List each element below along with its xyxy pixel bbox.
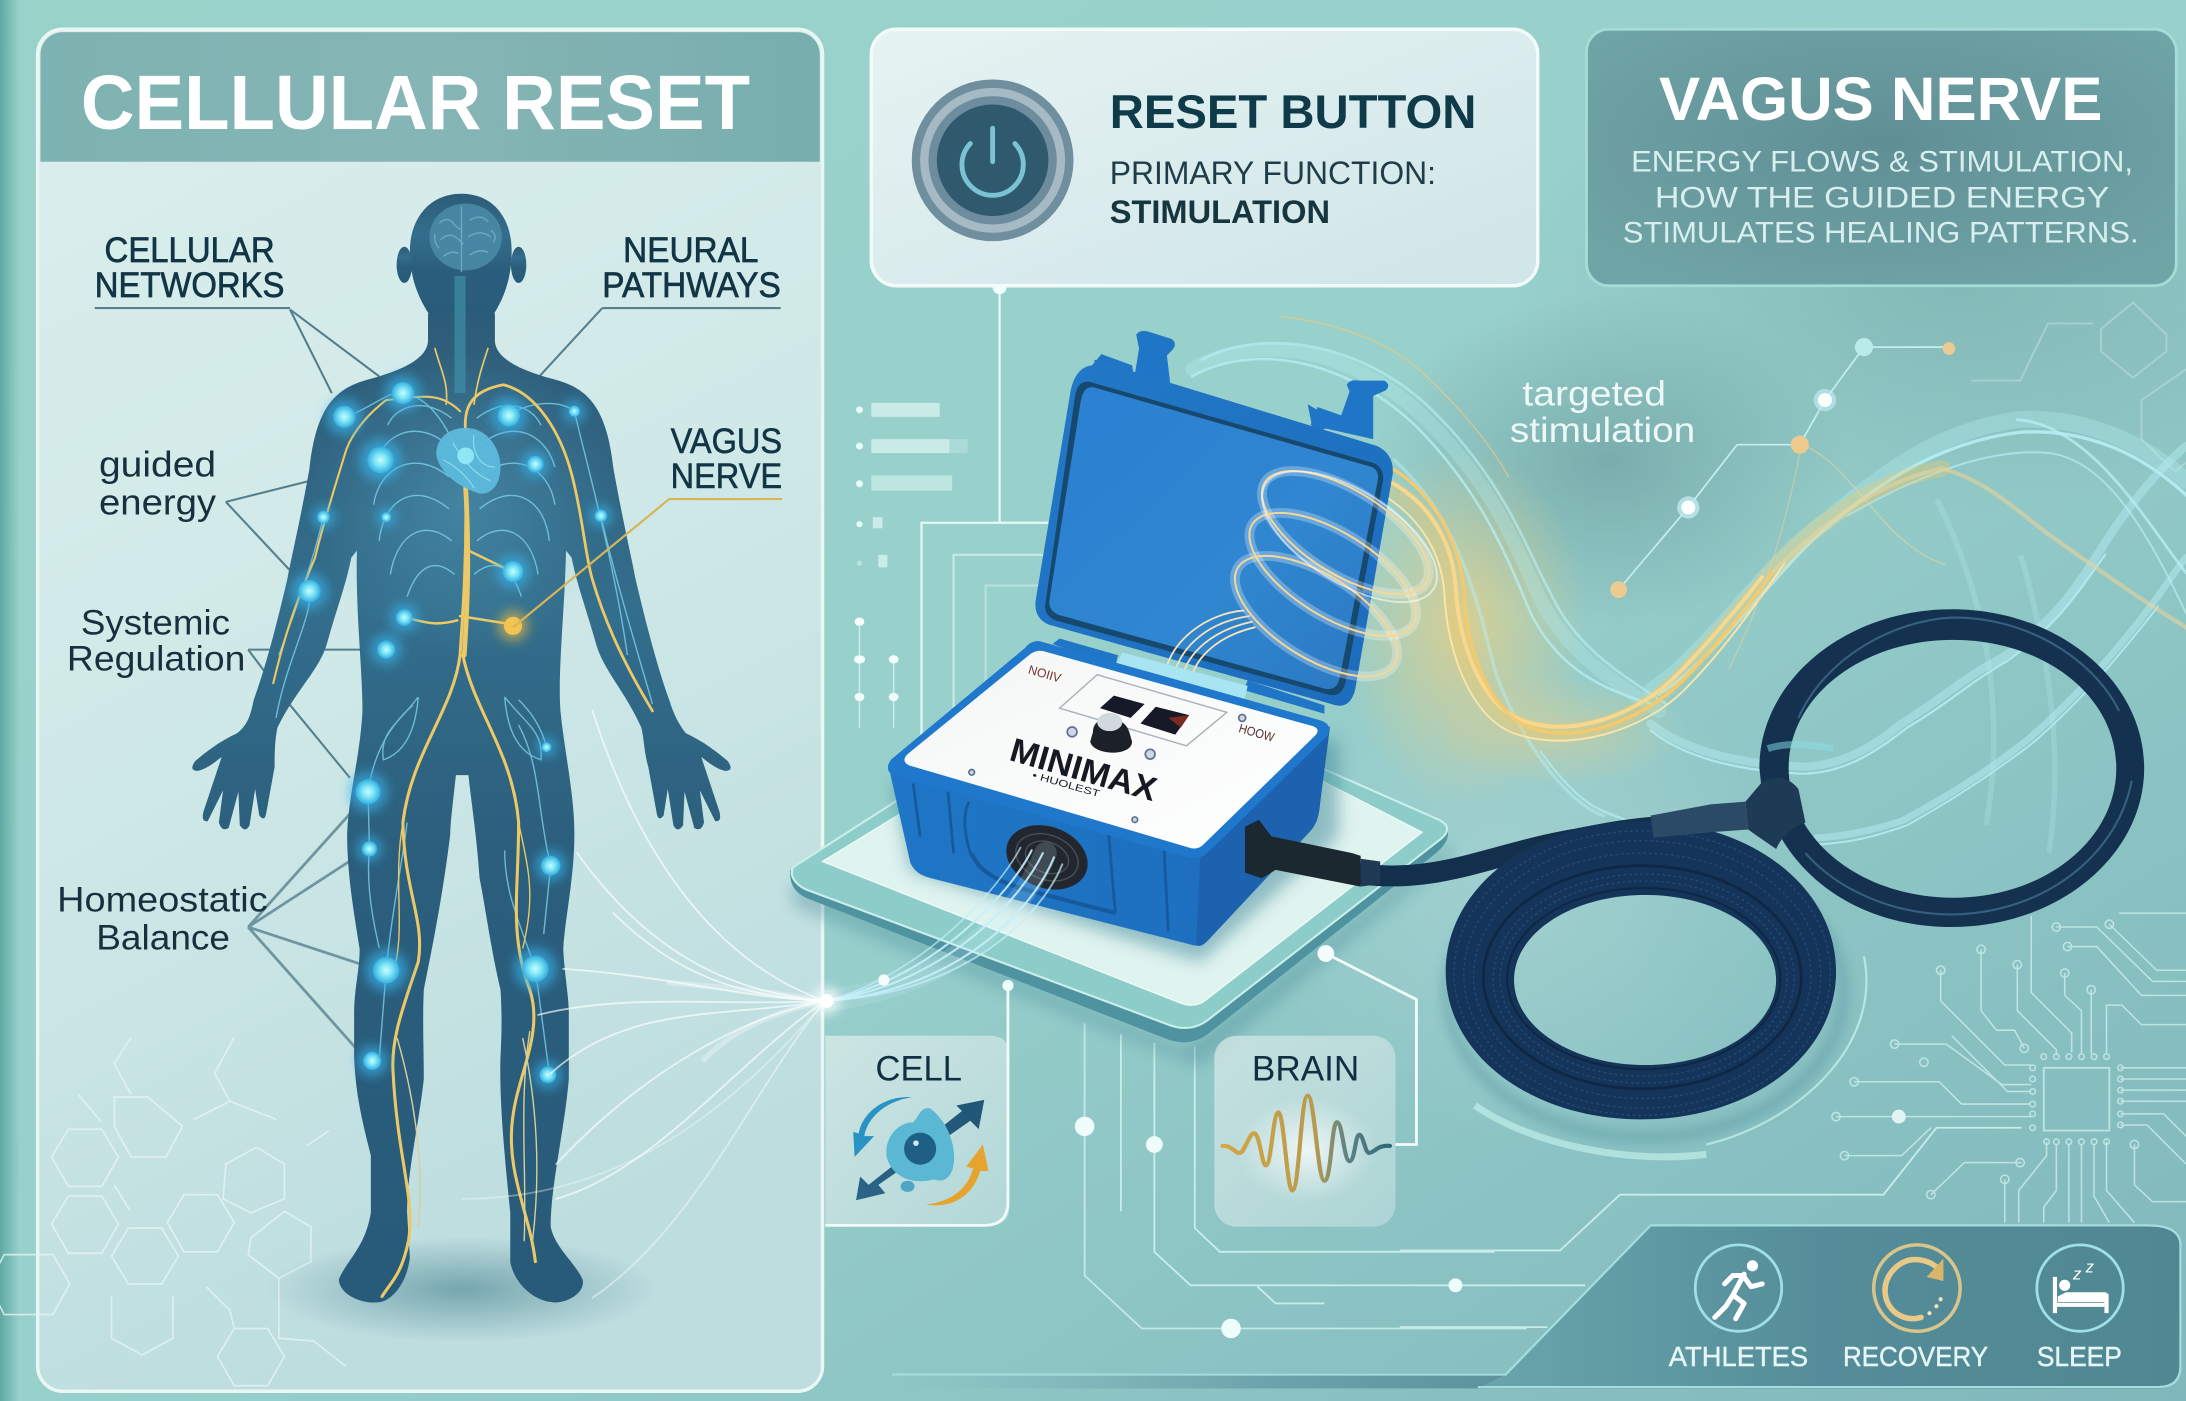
hinge (1053, 638, 1324, 714)
wave glow (1237, 1097, 1376, 1203)
label: systemic regulation: Regulation (67, 640, 245, 679)
circuit board pattern (1832, 913, 2186, 1223)
fan flow (827, 848, 1062, 1001)
label: guided energy: energy (99, 481, 217, 522)
loop glint (1768, 744, 1833, 749)
small lamps (969, 714, 1246, 822)
platform edge (790, 825, 1448, 1042)
label: systemic regulation: Systemic (81, 603, 230, 642)
label: cellular networks (95, 231, 284, 305)
panel: cellular reset (0, 29, 823, 1391)
energy ribbons: blue (1192, 343, 2186, 850)
loop (1759, 609, 2144, 927)
text: vagus description: HOW THE GUIDED ENERGY (1655, 183, 2109, 215)
label: vagus leader (513, 499, 782, 627)
panel: reset button (871, 29, 1538, 286)
label: guided energy: guided (99, 444, 216, 485)
case rim (888, 641, 1329, 858)
panel: cell (825, 986, 1009, 1225)
platform shadow (790, 843, 1450, 1066)
panel header band (40, 32, 820, 162)
cell connector (825, 986, 1008, 1225)
knob (1090, 713, 1132, 753)
platform surface (823, 781, 1422, 1005)
label: cellular networks: NETWORKS (95, 266, 284, 305)
leader lines (95, 308, 781, 1052)
label: cell: CELL (876, 1049, 962, 1088)
data bars decoration (854, 403, 968, 728)
lid shadow (892, 739, 1338, 962)
fan (997, 814, 1097, 900)
flow lines: body to device (463, 711, 825, 1298)
brain connector (1326, 954, 1416, 1144)
gold vagus node (498, 611, 528, 641)
white faceplate (904, 651, 1318, 848)
panel: applications (892, 1225, 2180, 1388)
node: flow junction (813, 974, 889, 1015)
icon: sleep: z (2085, 1258, 2095, 1277)
node: brain connector (1317, 945, 1334, 962)
device labels: • HUOLEST (1031, 770, 1101, 800)
chest glow (308, 349, 615, 655)
device labels: NOIIV (1027, 663, 1063, 686)
icon: cell with arrows (853, 1097, 988, 1205)
hexagon pattern left (0, 1037, 346, 1386)
label: homeostatic balance (57, 881, 268, 957)
label: cellular networks: CELLULAR (105, 231, 275, 270)
labels: applications: SLEEP (2037, 1341, 2122, 1372)
label: vagus nerve: VAGUS (671, 422, 782, 461)
label: neural pathways (602, 231, 781, 305)
hexagon pattern top right (1971, 303, 2186, 471)
label: brain: BRAIN (1252, 1049, 1359, 1088)
bottom band (892, 1373, 1506, 1388)
text: stimulation: STIMULATION (1110, 194, 1330, 230)
heading: vagus nerve: VAGUS NERVE (1659, 64, 2102, 133)
heading: reset button: RESET BUTTON (1110, 86, 1476, 139)
label: homeostatic balance: Homeostatic (57, 881, 268, 920)
body figure (192, 194, 731, 1303)
circuit nodes: center (1075, 1117, 1462, 1338)
icon: athletes (1695, 1245, 1782, 1331)
lid outer (1035, 360, 1393, 706)
silhouette (192, 194, 731, 1303)
label: homeostatic balance: Balance (96, 918, 230, 957)
coil shadow (1447, 848, 1843, 1138)
circuit lines: center (1085, 1023, 2021, 1329)
thin cable (1352, 827, 1659, 876)
icon: power button (912, 79, 1073, 241)
loop highlight (1798, 618, 2132, 914)
control inset (1060, 675, 1227, 746)
lid latches (1087, 331, 1388, 439)
icon: recovery (1874, 1245, 1960, 1331)
figure floor shadow (266, 1237, 657, 1342)
icon: brain wave (1223, 1096, 1390, 1191)
ribs (276, 393, 652, 1073)
connector: reset button (993, 280, 1007, 294)
network graph (1610, 338, 1955, 598)
panel outline (892, 1225, 2180, 1387)
icon: sleep: z (2072, 1265, 2082, 1284)
cable and coil (1245, 609, 2144, 1138)
node: cell connector (1002, 980, 1014, 991)
coil sleeve (1651, 802, 1748, 838)
text: vagus description: ENERGY FLOWS & STIMULATION, (1631, 146, 2133, 178)
arcs around coil (1475, 956, 1866, 1157)
label: neural pathways: PATHWAYS (602, 266, 781, 305)
labels: applications: ATHLETES (1669, 1341, 1808, 1372)
spine (456, 276, 464, 393)
label: vagus nerve (671, 422, 782, 496)
coil strands (1454, 831, 1830, 1115)
text: vagus description (1623, 146, 2139, 250)
connector (1245, 820, 1380, 887)
heart (436, 428, 500, 494)
case front ribs (913, 783, 1168, 931)
title: CELLULAR RESET (81, 61, 750, 146)
label: guided energy (99, 444, 217, 522)
platform (790, 768, 1450, 1066)
panel body (38, 29, 823, 1391)
brain (429, 204, 502, 272)
lid gasket (1045, 382, 1383, 695)
label: targeted stimulation: targeted (1522, 375, 1666, 414)
device: minimax case (827, 331, 1458, 1001)
label: neural pathways: NEURAL (623, 231, 758, 270)
device labels: HOOW (1237, 721, 1276, 745)
label: vagus nerve: NERVE (671, 457, 782, 496)
label: systemic regulation (67, 603, 245, 679)
energy ribbons: gold (1281, 316, 2186, 741)
nerves (273, 349, 652, 1296)
coil (1446, 821, 1836, 1119)
labels: applications: RECOVERY (1843, 1341, 1988, 1372)
energy swirl (1165, 445, 1458, 700)
display screens (1100, 696, 1189, 735)
device labels: MINIMAX (1006, 732, 1161, 809)
label: targeted stimulation (1510, 375, 1695, 450)
case body (888, 726, 1330, 946)
platform glass (792, 768, 1447, 1028)
labels: applications (1669, 1341, 2122, 1372)
text: vagus description: STIMULATES HEALING PATTERNS. (1623, 218, 2139, 250)
device labels (1006, 663, 1276, 809)
panel: vagus nerve (1587, 29, 2176, 286)
glowing nodes (291, 375, 612, 1089)
circuit lines: upper centre (922, 286, 1048, 809)
case right side shade (1196, 726, 1330, 946)
label: targeted stimulation: stimulation (1510, 411, 1695, 450)
text: primary function: PRIMARY FUNCTION: (1110, 155, 1436, 191)
icon: sleep (2037, 1245, 2123, 1331)
t-junction (1745, 778, 1805, 849)
lid inner (1049, 387, 1378, 689)
panel: brain (1214, 954, 1416, 1227)
